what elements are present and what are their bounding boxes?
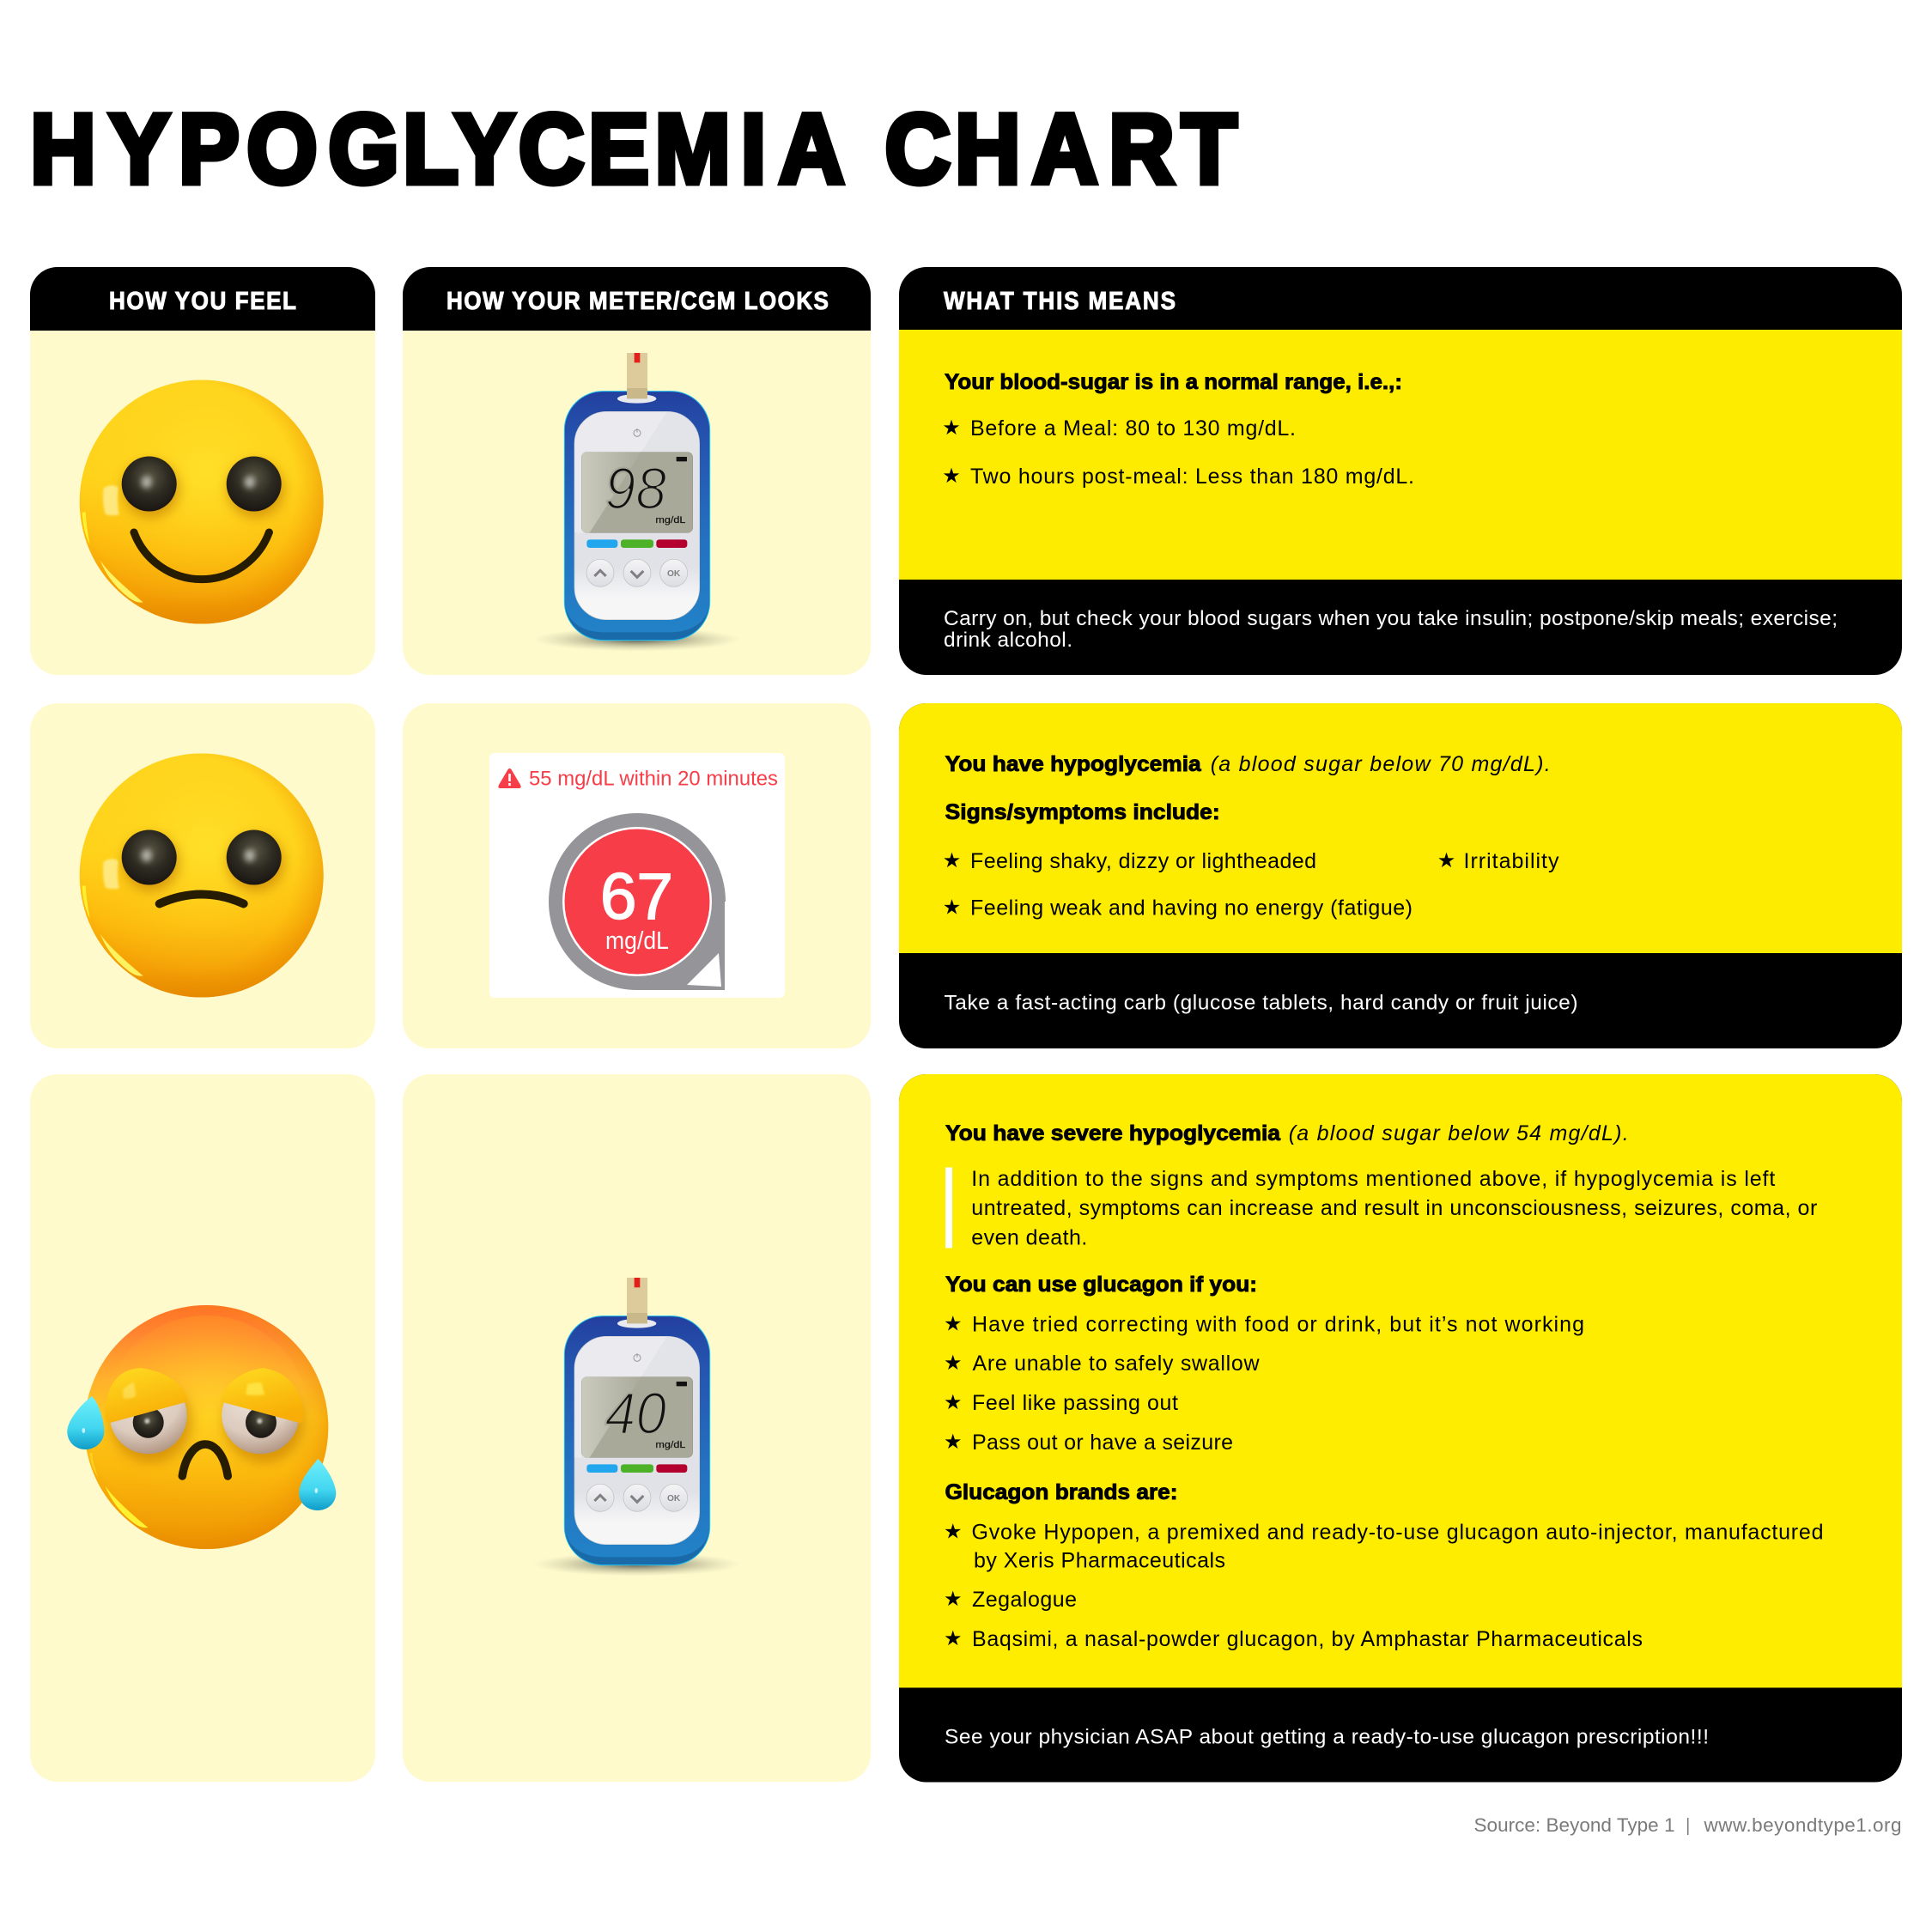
title bbox=[30, 94, 1236, 204]
panel: meter, severe row bbox=[403, 1074, 871, 1782]
text: glucagon use list bbox=[944, 1273, 1584, 1455]
callout: carry on: Carry on, but check your blood sugars when you take insulin; postpone/skip meals; exercise; bbox=[944, 607, 1838, 630]
text: normal range: ★ bbox=[942, 416, 961, 440]
icon: glucose meter reading 98: mg/dL bbox=[655, 515, 685, 526]
text: glucagon use list: Have tried correcting with food or drink, but it’s not working bbox=[972, 1312, 1584, 1336]
text: glucagon use list: ★ bbox=[944, 1312, 962, 1336]
panel: CGM, hypoglycemia row bbox=[403, 703, 871, 1048]
icon: warning triangle bbox=[498, 769, 521, 788]
source line: www.beyondtype1.org bbox=[1704, 1814, 1901, 1836]
icon: glucose meter reading 98 bbox=[532, 353, 741, 652]
panel: what this means, severe hypoglycemia bbox=[899, 1074, 1902, 1783]
text: severe hypoglycemia definition bbox=[945, 1121, 1629, 1145]
text: glucagon use list: ★ bbox=[944, 1390, 962, 1414]
callout: symptoms can increase bbox=[945, 1167, 1817, 1250]
callout: symptoms can increase: untreated, symptoms can increase and result in unconsciousness, seizures, coma, or bbox=[971, 1196, 1817, 1220]
panel: how you feel, normal row bbox=[30, 267, 375, 675]
icon: glucose meter reading 40: 40 bbox=[605, 1381, 666, 1446]
text: severe hypoglycemia definition: (a blood sugar below 54 mg/dL). bbox=[1289, 1121, 1629, 1145]
text: signs and symptoms: Signs/symptoms include: bbox=[945, 800, 1220, 824]
text: glucagon brands list: ★ bbox=[944, 1626, 962, 1650]
icon: glucose meter reading 98: 98 bbox=[605, 456, 666, 521]
text: signs and symptoms: ★ bbox=[943, 895, 961, 919]
heading: how you feel: HOW YOU FEEL bbox=[109, 287, 296, 314]
text: normal range: Two hours post-meal: Less than 180 mg/dL. bbox=[970, 465, 1414, 489]
icon: smiling emoji bbox=[80, 380, 324, 623]
icon: frowning emoji bbox=[80, 754, 324, 998]
source line: Source: Beyond Type 1 bbox=[1473, 1814, 1674, 1836]
text: glucagon use list: You can use glucagon if you: bbox=[945, 1273, 1257, 1297]
callout: carry on: drink alcohol. bbox=[944, 629, 1072, 652]
text: signs and symptoms: ★ bbox=[943, 848, 961, 872]
text: glucagon brands list bbox=[944, 1480, 1824, 1651]
text: glucagon brands list: Gvoke Hypopen, a premixed and ready-to-use glucagon auto-injector, manufactured bbox=[972, 1520, 1824, 1544]
callout: see your physician: See your physician ASAP about getting a ready-to-use glucagon prescription!!! bbox=[945, 1726, 1709, 1748]
text: signs and symptoms: Feeling shaky, dizzy or lightheaded bbox=[970, 849, 1316, 873]
icon: glucose meter reading 98: OK bbox=[667, 569, 681, 579]
callout: fast-acting carb: Take a fast-acting carb (glucose tablets, hard candy or fruit juice) bbox=[945, 991, 1578, 1015]
text: hypoglycemia definition: (a blood sugar below 70 mg/dL). bbox=[1211, 752, 1551, 776]
source line bbox=[1473, 1814, 1901, 1836]
text: hypoglycemia definition bbox=[945, 752, 1551, 776]
text: normal range bbox=[942, 370, 1414, 489]
text: normal range: Before a Meal: 80 to 130 mg/dL. bbox=[970, 416, 1296, 440]
icon: glucose meter reading 40 bbox=[532, 1278, 741, 1577]
text: signs and symptoms: Feeling weak and having no energy (fatigue) bbox=[970, 896, 1413, 920]
text: alert: 55 mg/dL within 20 minutes bbox=[529, 768, 778, 790]
panel: what this means, normal range bbox=[899, 267, 1902, 675]
text: glucagon brands list: Zegalogue bbox=[972, 1588, 1077, 1612]
chart: glucose dial: mg/dL bbox=[605, 927, 669, 955]
text: glucagon use list: Feel like passing out bbox=[972, 1391, 1178, 1415]
text: signs and symptoms: Irritability bbox=[1463, 849, 1559, 873]
panel: meter, normal row bbox=[403, 267, 871, 675]
text: severe hypoglycemia definition: You have severe hypoglycemia bbox=[945, 1121, 1281, 1145]
text: glucagon use list: ★ bbox=[944, 1430, 962, 1454]
panel: what this means, hypoglycemia bbox=[899, 703, 1902, 1048]
text: glucagon brands list: Baqsimi, a nasal-powder glucagon, by Amphastar Pharmaceuticals bbox=[972, 1627, 1643, 1651]
text: normal range: Your blood-sugar is in a normal range, i.e.,: bbox=[945, 370, 1402, 394]
chart: glucose dial bbox=[549, 813, 726, 990]
text: glucagon use list: Pass out or have a seizure bbox=[972, 1431, 1233, 1455]
title: HYPOGLYCEMIA bbox=[30, 94, 844, 204]
callout: symptoms can increase: In addition to the signs and symptoms mentioned above, if hypoglycemia is left bbox=[971, 1167, 1775, 1191]
chart: glucose dial: 67 bbox=[600, 860, 673, 933]
text: glucagon brands list: ★ bbox=[944, 1587, 962, 1611]
icon: glucose meter reading 40: mg/dL bbox=[655, 1440, 685, 1450]
panel: how you feel, hypoglycemia row bbox=[30, 703, 375, 1048]
callout: carry on bbox=[944, 607, 1838, 652]
text: signs and symptoms bbox=[943, 800, 1559, 920]
heading: what this means: WHAT THIS MEANS bbox=[944, 287, 1176, 314]
text: normal range: ★ bbox=[942, 464, 961, 488]
text: glucagon use list: Are unable to safely swallow bbox=[972, 1352, 1260, 1376]
text: signs and symptoms: ★ bbox=[1437, 848, 1455, 872]
text: glucagon brands list: Glucagon brands are: bbox=[945, 1480, 1178, 1504]
text: glucagon brands list: ★ bbox=[944, 1520, 962, 1544]
chart: CGM reading card bbox=[489, 753, 785, 998]
text: hypoglycemia definition: You have hypoglycemia bbox=[945, 752, 1202, 776]
text: glucagon brands list: by Xeris Pharmaceuticals bbox=[974, 1549, 1225, 1573]
callout: symptoms can increase: even death. bbox=[971, 1226, 1087, 1250]
title: CHART bbox=[885, 94, 1236, 204]
text: glucagon use list: ★ bbox=[944, 1351, 962, 1375]
panel: how you feel, severe row bbox=[30, 1074, 375, 1782]
icon: sweating emoji bbox=[67, 1305, 336, 1549]
icon: glucose meter reading 40: OK bbox=[667, 1494, 681, 1504]
heading: how your meter looks: HOW YOUR METER/CGM LOOKS bbox=[447, 287, 829, 314]
